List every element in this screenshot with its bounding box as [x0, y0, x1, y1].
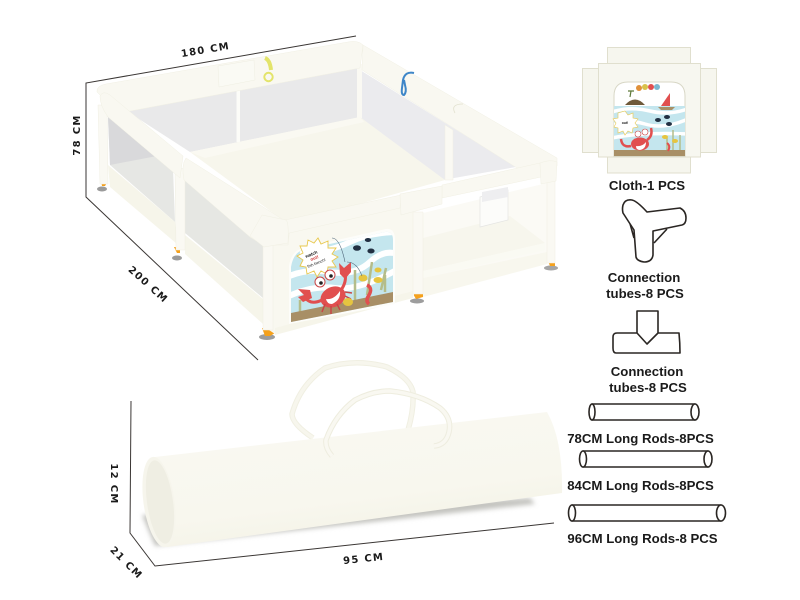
bag inner: [141, 459, 179, 545]
caption: connection tubes 2: tubes-8 PCS: [609, 380, 687, 395]
printed crab panel: [289, 229, 395, 324]
icon: yellow ring strap: [264, 58, 273, 81]
label: 78 CM: 78 CM: [72, 114, 83, 156]
left front rail: [100, 93, 183, 178]
right rail: [362, 45, 557, 168]
label: 12 CM: 12 CM: [108, 463, 119, 505]
floor: [190, 117, 445, 224]
label: 200 CM: 200 CM: [126, 265, 170, 306]
icon: Y connection tube: [622, 200, 686, 262]
front handle: [326, 391, 450, 456]
caption: 78CM rods: 78CM Long Rods-8PCS: [567, 431, 714, 446]
right lower open side: [423, 183, 547, 297]
feet: [97, 181, 558, 340]
bag shadow: [142, 498, 535, 546]
crab: [298, 262, 352, 314]
caption: connection tubes 1: tubes-8 PCS: [606, 286, 684, 301]
cloth part: [582, 48, 716, 193]
back post: [236, 78, 240, 142]
front right rail: [250, 161, 557, 247]
right rail joint: [454, 104, 463, 113]
playpen: [97, 41, 558, 340]
cloth printed art: [612, 82, 690, 157]
dimension lines: bag: [130, 401, 554, 566]
cloth main panel: [598, 64, 700, 157]
left front rail segment 2: [183, 158, 290, 245]
right wall post: [445, 125, 453, 180]
dimension lines: playpen: [86, 36, 356, 360]
caption: connection tubes 2: Connection: [611, 364, 683, 379]
caption: connection tubes 2: [609, 364, 687, 395]
cloth flaps: [582, 48, 716, 173]
back rail: [97, 41, 363, 112]
starburst speech bubble: watch: [304, 249, 318, 259]
caption: 84CM rods: 84CM Long Rods-8PCS: [567, 478, 714, 493]
starburst speech bubble: out!: [310, 254, 320, 262]
label: 180 CM: 180 CM: [180, 41, 231, 60]
caption: connection tubes 1: [606, 270, 684, 301]
rod 78CM: [589, 404, 699, 420]
right wall mesh: [360, 70, 516, 180]
carry bag: [137, 363, 562, 549]
bag end opening: [137, 455, 181, 549]
back wall mesh: [125, 68, 357, 152]
front panel with posts: [263, 178, 555, 335]
bag body: [155, 412, 562, 547]
seahorse and fish: [332, 238, 382, 306]
icon: blue loop strap: [402, 73, 414, 95]
starburst speech bubble: [297, 238, 338, 277]
back corner post: [357, 64, 362, 118]
label: 95 CM: 95 CM: [343, 552, 385, 567]
rod 84CM: [580, 451, 712, 467]
icon: T connection tube: [613, 311, 680, 353]
caption: connection tubes 1: Connection: [608, 270, 680, 285]
cloth caption: Cloth-1 PCS: [609, 178, 685, 193]
cloth printed art: out!: [622, 121, 628, 125]
caption: 96CM rods: 96CM Long Rods-8 PCS: [567, 531, 718, 546]
left lower wall: [98, 105, 263, 324]
back handle: [292, 363, 413, 438]
label: 21 CM: 21 CM: [107, 545, 144, 582]
starburst speech bubble: fish bench!: [307, 257, 326, 269]
rod 96CM: [568, 505, 726, 521]
